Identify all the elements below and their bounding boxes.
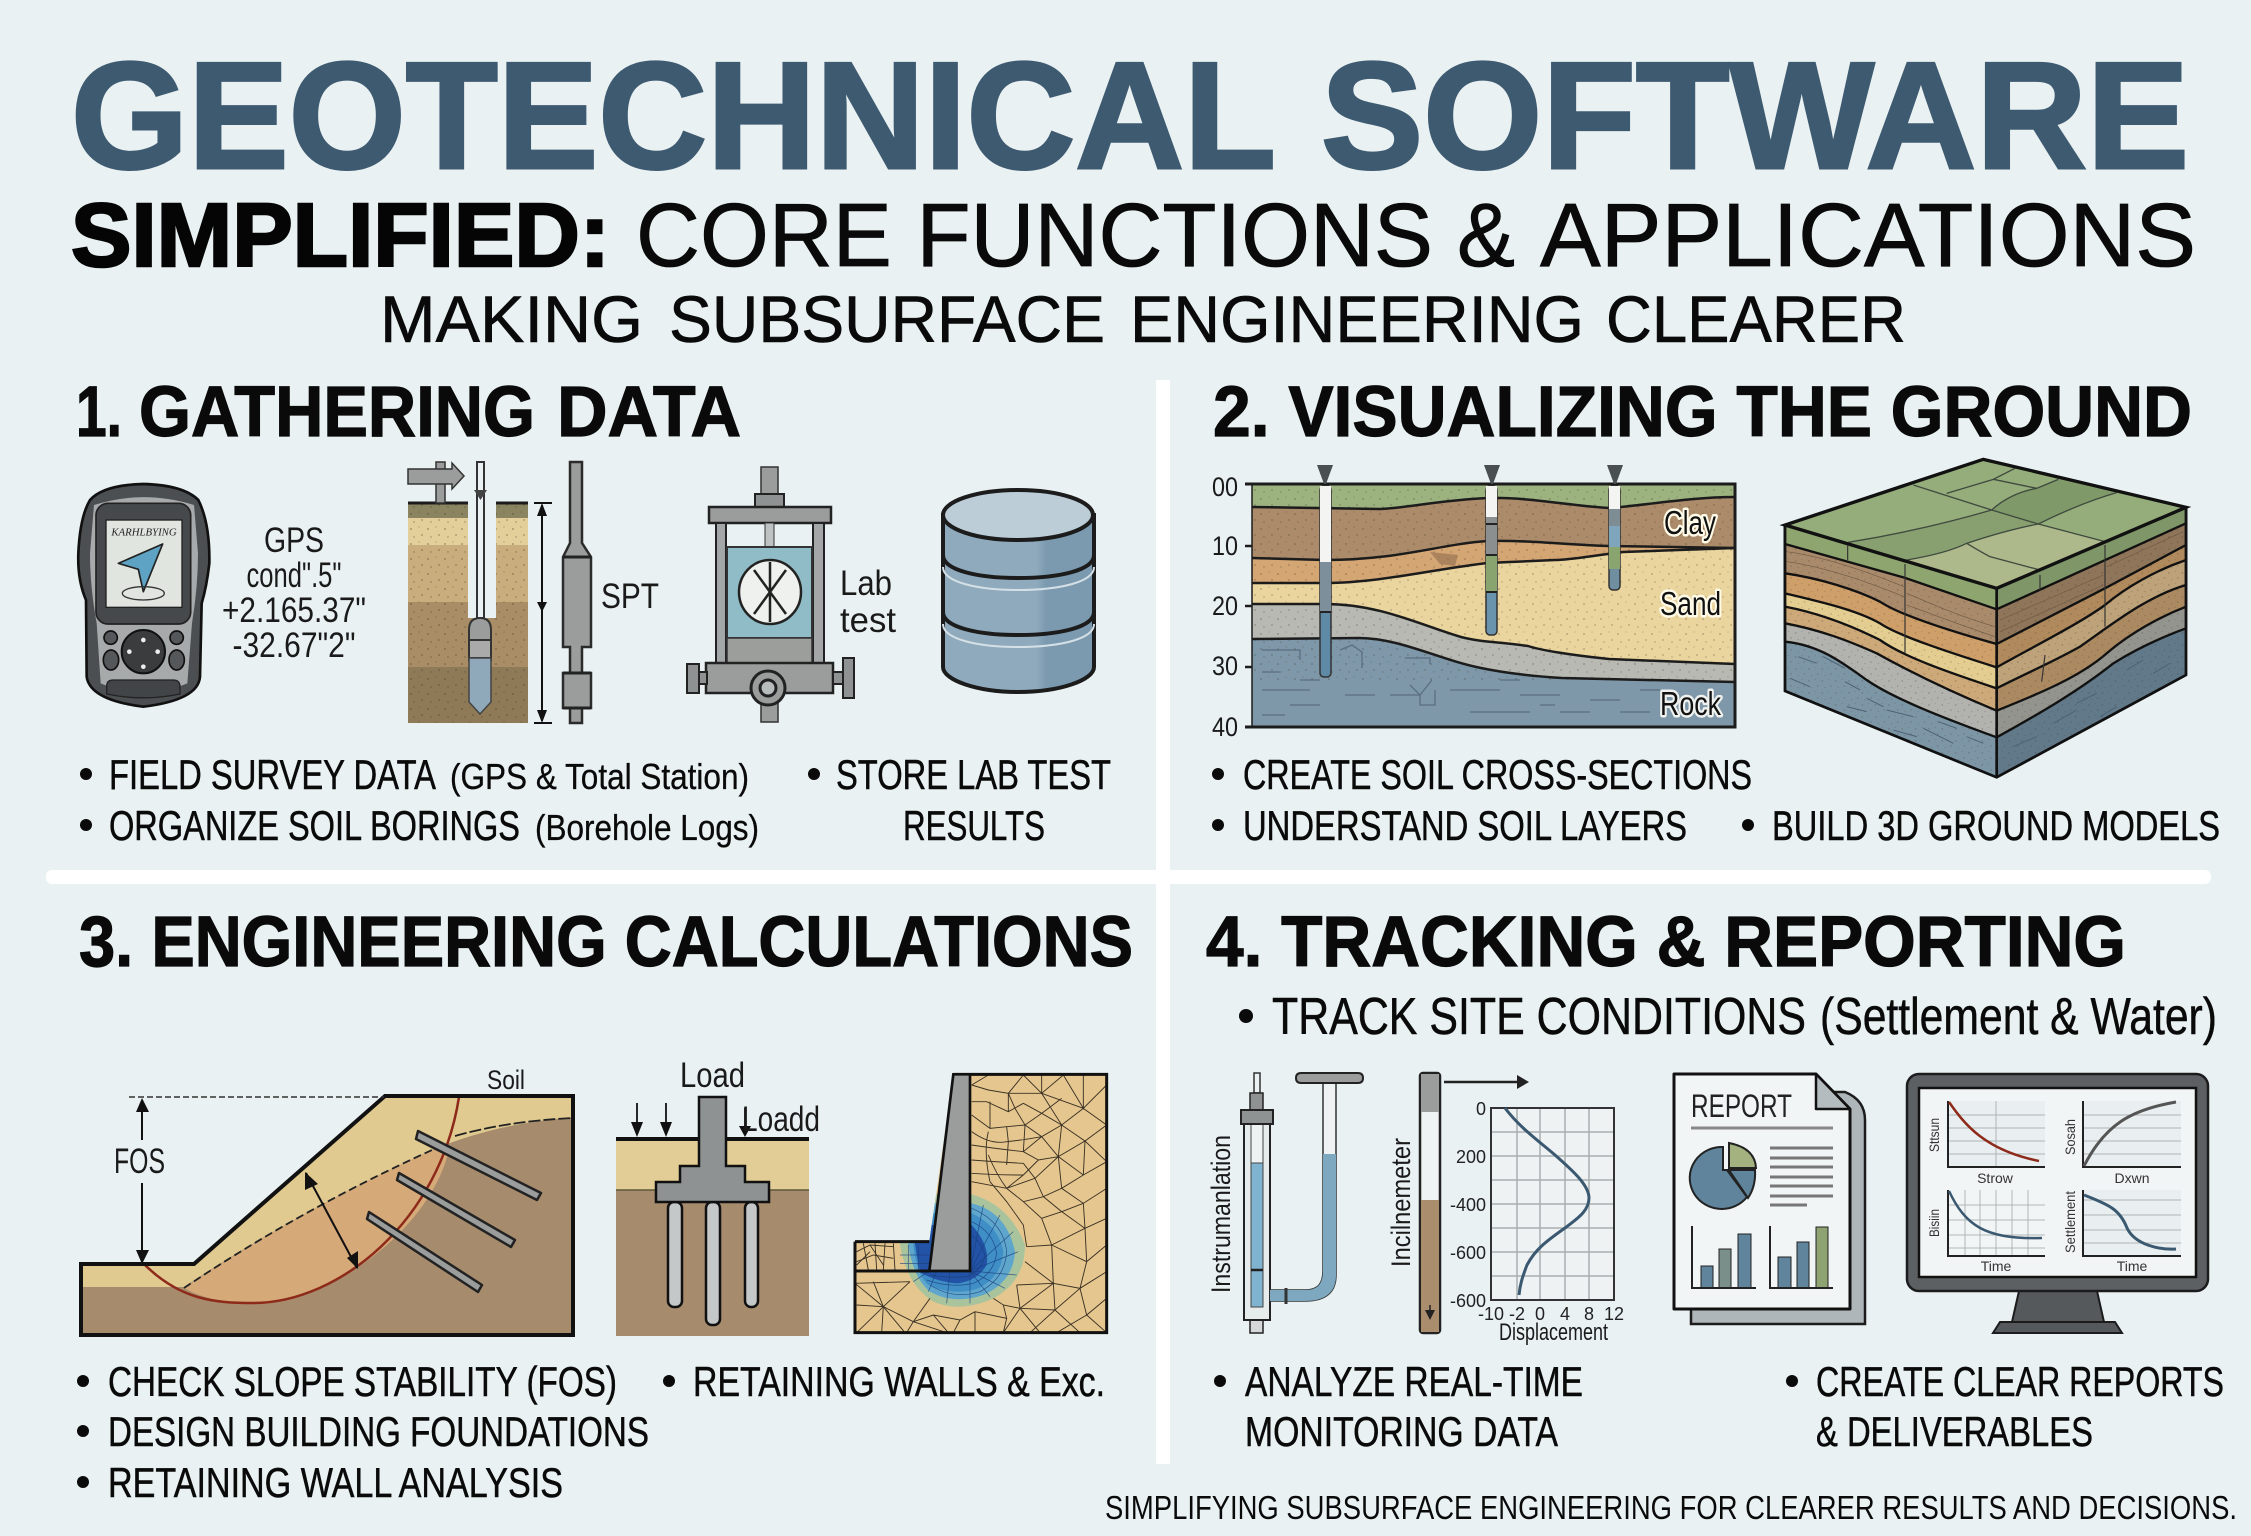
displacement chart: 8 [1584,1304,1594,1324]
tagline [380,282,1906,356]
mini chart: top left: Sttsun [1926,1118,1942,1152]
displacement chart: -400 [1450,1195,1486,1215]
pile foundation diagram: Loadd [742,1100,820,1139]
lab test apparatus: Lab [840,564,892,603]
displacement chart: -2 [1509,1304,1525,1324]
displacement chart: 0 [1535,1304,1545,1324]
axis depth labels: 00 [1212,472,1238,502]
bullets: reports [1786,1358,2224,1455]
borehole diagram [408,462,528,723]
factor of safety callout: FOS [114,1142,165,1181]
GPS readout: +2.165.37" [222,591,366,630]
subtitle: SIMPLIFIED: [71,186,610,286]
pile foundation diagram: Load [680,1056,745,1095]
boreholes [1317,465,1623,677]
bullets: calculations: RETAINING WALLS & Exc. [693,1358,1105,1405]
title: SOFTWARE [1321,31,2189,201]
bullet: track site conditions [1239,988,2217,1046]
soil labels [1660,504,1721,722]
mini chart: bottom right: Settlement [2062,1191,2078,1253]
displacement chart: -10 [1478,1304,1504,1324]
bullets: data [80,751,1111,849]
displacement chart: Displacement [1499,1319,1608,1346]
heading: gathering data: 1. [76,373,122,452]
icon: database cylinder [943,490,1094,692]
monitor dashboard [1907,1074,2208,1333]
panel: tracking and reporting [1206,903,2224,1455]
retaining wall FEM mesh [855,1074,1107,1333]
bullets: ground: UNDERSTAND SOIL LAYERS [1243,802,1687,849]
axis depth labels: 20 [1212,591,1238,621]
panel: engineering calculations [77,903,1133,1506]
mini chart: top left [1926,1101,2045,1186]
bullets: calculations: DESIGN BUILDING FOUNDATIONS [108,1408,649,1455]
tagline: MAKING [380,282,643,356]
bullets: ground [1212,751,2220,849]
subtitle [71,186,2196,286]
displacement chart: -600 [1450,1291,1486,1311]
mini chart: bottom left: Time [1981,1258,2012,1274]
piezometer instrument [1206,1073,1363,1333]
piezometer instrument: Instrumanlation [1206,1135,1236,1293]
inclinometer tube: Incilnemeter [1386,1138,1416,1267]
soil labels: Sand [1660,585,1721,622]
displacement chart: 0 [1476,1099,1486,1119]
tagline: ENGINEERING [1130,282,1584,356]
displacement chart [1450,1099,1624,1346]
mini chart: top left: Strow [1977,1170,2014,1186]
bullets: data: FIELD SURVEY DATA [109,751,436,798]
bullet: track site conditions: TRACK SITE CONDITIONS [1272,988,1806,1046]
panel: visualizing the ground [1212,373,2220,849]
mini chart: bottom left: Bisiin [1926,1209,1942,1237]
lab test apparatus [687,467,896,722]
heading: calculations: 3. ENGINEERING CALCULATIONS [79,903,1133,982]
displacement chart: 4 [1560,1304,1570,1324]
bullets: calculations: RETAINING WALL ANALYSIS [108,1459,563,1506]
dimension line [534,503,552,723]
GPS readout: -32.67"2" [232,626,356,665]
factor of safety callout [114,1065,525,1264]
heading: visualizing: 2. VISUALIZING THE GROUND [1213,373,2192,452]
bullets: ground: CREATE SOIL CROSS-SECTIONS [1243,751,1752,798]
mini chart: bottom left [1926,1190,2045,1274]
GPS readout [222,521,366,665]
lab test apparatus: test [840,601,896,640]
subtitle: CORE FUNCTIONS [636,186,1433,286]
heading: gathering data [76,373,741,452]
heading: tracking: 4. TRACKING & REPORTING [1206,903,2126,982]
bullets: data: (GPS & Total Station) [450,756,749,797]
tagline: SUBSURFACE [669,282,1105,356]
subtitle: APPLICATIONS [1540,186,2196,286]
mini chart: bottom right [2062,1190,2181,1274]
GPS readout: GPS [264,521,324,560]
mini chart: top right: Dxwn [2114,1170,2150,1186]
bullets: monitoring [1214,1358,1583,1455]
slope stability diagram [81,1096,573,1335]
pile foundation diagram [616,1056,820,1336]
bullets: reports: & DELIVERABLES [1816,1408,2093,1455]
bullets: data: STORE LAB TEST [836,751,1111,798]
bullets: data: ORGANIZE SOIL BORINGS [109,802,520,849]
bullets: calculations [77,1358,1105,1506]
bullets: monitoring: MONITORING DATA [1245,1408,1558,1455]
soil cross-section [1245,484,1735,727]
SPT sampler: SPT [601,577,659,616]
soil labels: Clay [1664,504,1716,541]
title: GEOTECHNICAL [71,31,1276,201]
subtitle: & [1457,186,1515,286]
factor of safety callout: Soil [487,1065,525,1095]
heading: gathering data: GATHERING [139,373,535,452]
mini chart: top right [2062,1101,2181,1186]
displacement chart: 12 [1604,1304,1624,1324]
report document icon: REPORT [1691,1088,1792,1124]
icon: GPS handheld: KARHLBYING [110,527,177,538]
title [71,31,2189,201]
axis depth labels: 30 [1212,651,1238,681]
panel: gathering data [76,373,1111,849]
bullets: monitoring: ANALYZE REAL-TIME [1245,1358,1583,1405]
icon: GPS handheld [78,484,209,707]
axis depth labels: 10 [1212,531,1238,561]
bullets: data: (Borehole Logs) [535,807,759,848]
inclinometer tube [1386,1073,1529,1333]
GPS readout: cond".5" [246,556,342,595]
soil labels: Rock [1660,685,1721,722]
displacement chart: 200 [1456,1147,1486,1167]
mini chart: bottom right: Time [2117,1258,2148,1274]
displacement chart: -600 [1450,1243,1486,1263]
tagline: CLEARER [1606,282,1906,356]
heading: gathering data: DATA [557,373,741,452]
axis depth labels: 40 [1212,712,1238,742]
axis depth labels [1212,472,1238,742]
3D ground block [1785,459,2186,777]
report document icon [1674,1074,1865,1324]
bullets: data: RESULTS [903,802,1045,849]
SPT sampler [563,462,659,723]
bullets: calculations: CHECK SLOPE STABILITY (FOS) [108,1358,617,1405]
mini chart: top right: Sosah [2062,1119,2078,1155]
